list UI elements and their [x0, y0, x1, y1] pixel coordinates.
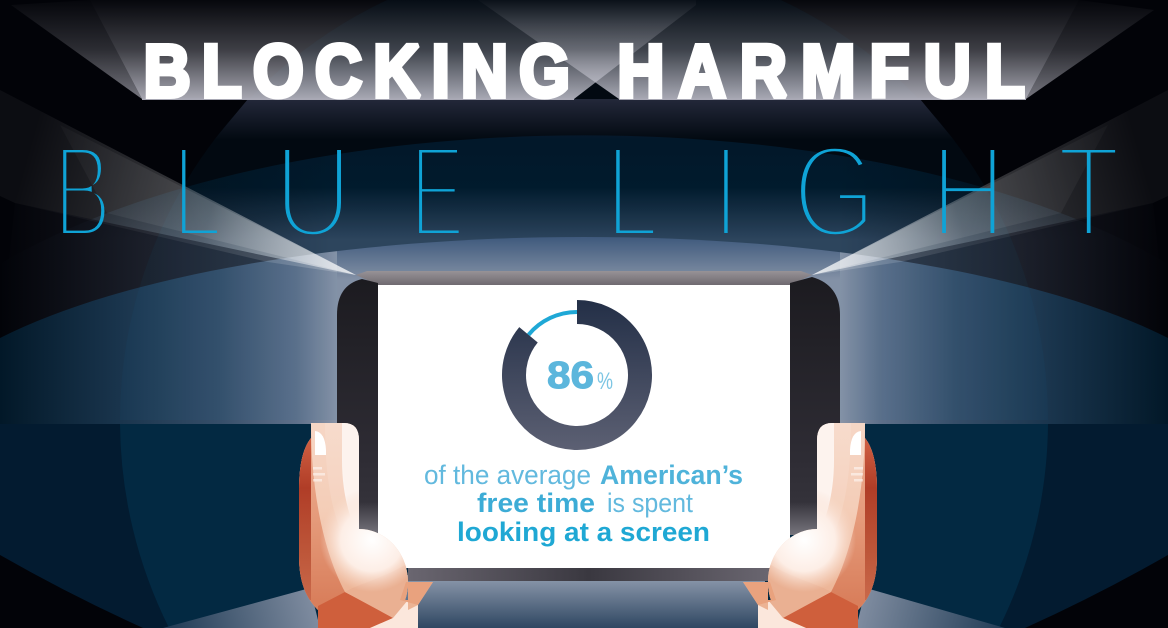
light below tablet — [163, 575, 1005, 628]
tablet — [337, 271, 840, 581]
tablet screen — [378, 285, 790, 568]
title: blue light: L — [606, 119, 659, 265]
title: blue light: T — [1057, 119, 1120, 266]
title: blue light: G — [793, 119, 876, 265]
title: blue light: U — [274, 118, 353, 265]
86 percent value: 86 — [547, 355, 594, 397]
title: blocking harmful — [144, 30, 1025, 112]
donut chart 86%: % — [597, 368, 613, 395]
light beams from tablet corners, left — [0, 90, 356, 275]
thumbnail — [315, 431, 326, 455]
donut chart 86% — [514, 312, 640, 438]
caption: American’s — [600, 460, 743, 490]
right hand — [738, 423, 878, 628]
title: blue light: B — [54, 118, 111, 265]
caption: of the average — [424, 460, 591, 490]
title: blocking harmful: HARMFUL — [617, 30, 1025, 112]
caption: free time — [477, 488, 595, 518]
caption: looking at a screen — [457, 517, 710, 547]
title: blue light: I — [713, 119, 739, 265]
left hand — [298, 423, 438, 628]
caption: is spent — [607, 488, 693, 518]
title: blocking harmful: BLOCKING — [144, 30, 570, 112]
caption — [424, 460, 743, 547]
knuckle lines — [313, 467, 325, 482]
title: blue light: H — [931, 119, 1006, 266]
light beams from tablet corners, right — [812, 90, 1168, 275]
title: blue light — [63, 148, 1116, 234]
title: blue light: L — [172, 118, 223, 265]
light beams behind title — [11, 0, 1154, 140]
title: blue light: E — [410, 119, 464, 266]
